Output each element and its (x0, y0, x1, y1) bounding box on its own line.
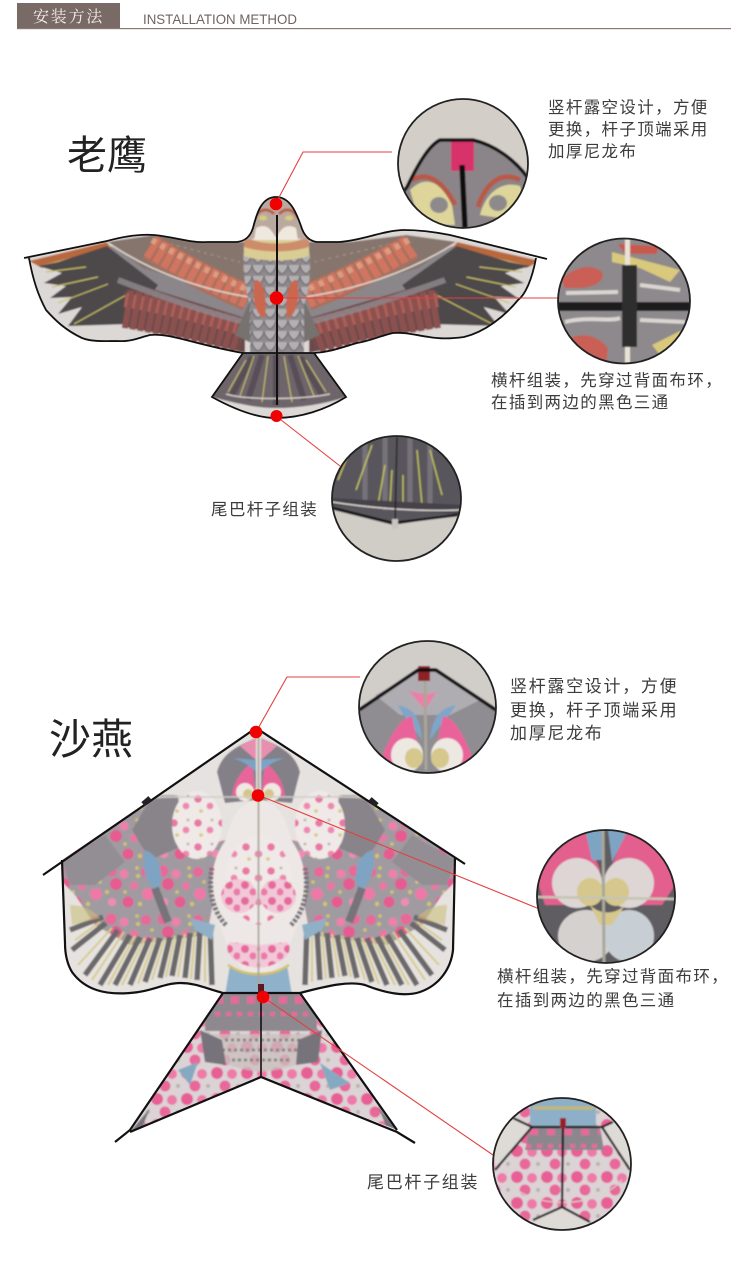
eagle outline (24, 197, 547, 418)
caption: swallow nose: 更换，杆子顶端采用 (510, 701, 678, 720)
header tab (17, 3, 120, 28)
caption: swallow cross joint: 横杆组装，先穿过背面布环， (497, 967, 729, 986)
eagle tail (213, 354, 345, 417)
swallow outline (43, 728, 465, 1143)
caption: swallow tail: 尾巴杆子组装 (367, 1173, 479, 1192)
detail circle: swallow nose (355, 638, 500, 778)
swallow tail artwork (131, 994, 396, 1130)
title: swallow: 沙燕 (49, 716, 133, 763)
swallow body artwork (55, 725, 465, 1000)
caption: eagle nose: 加厚尼龙布 (548, 142, 637, 161)
detail circle: eagle cross connector (555, 235, 695, 370)
detail circle: eagle tail (330, 434, 465, 565)
callout lines: eagle (276, 152, 559, 466)
detail circle: swallow tail (490, 1095, 636, 1235)
callout lines: swallow (256, 677, 537, 1155)
marker dots: swallow (250, 726, 269, 1003)
caption: swallow nose: 加厚尼龙布 (510, 724, 604, 743)
caption: eagle nose (548, 98, 709, 161)
title: eagle: 老鹰 (67, 134, 147, 178)
caption: swallow nose: 竖杆露空设计，方便 (510, 677, 678, 696)
caption: eagle nose: 竖杆露空设计，方便 (548, 98, 709, 117)
caption: swallow nose (510, 677, 678, 743)
caption: eagle cross connector (491, 371, 723, 412)
kite: swallow (43, 725, 465, 1143)
kite: eagle (20, 190, 550, 425)
caption: swallow cross joint: 在插到两边的黑色三通 (497, 991, 676, 1010)
caption: eagle nose: 更换，杆子顶端采用 (548, 120, 709, 139)
detail circle: eagle nose (397, 98, 529, 229)
caption: eagle cross connector: 在插到两边的黑色三通 (491, 393, 670, 412)
section header (17, 3, 731, 29)
header title: 安装方法 (33, 8, 104, 26)
eagle wings and body artwork (26, 198, 536, 352)
marker dots: eagle (270, 198, 283, 422)
caption: swallow cross joint (497, 967, 729, 1010)
caption: eagle tail: 尾巴杆子组装 (211, 500, 318, 519)
header english subtitle: INSTALLATION METHOD (143, 11, 297, 27)
detail circle: swallow cross joint (533, 826, 679, 966)
caption: eagle cross connector: 横杆组装，先穿过背面布环， (491, 371, 723, 390)
